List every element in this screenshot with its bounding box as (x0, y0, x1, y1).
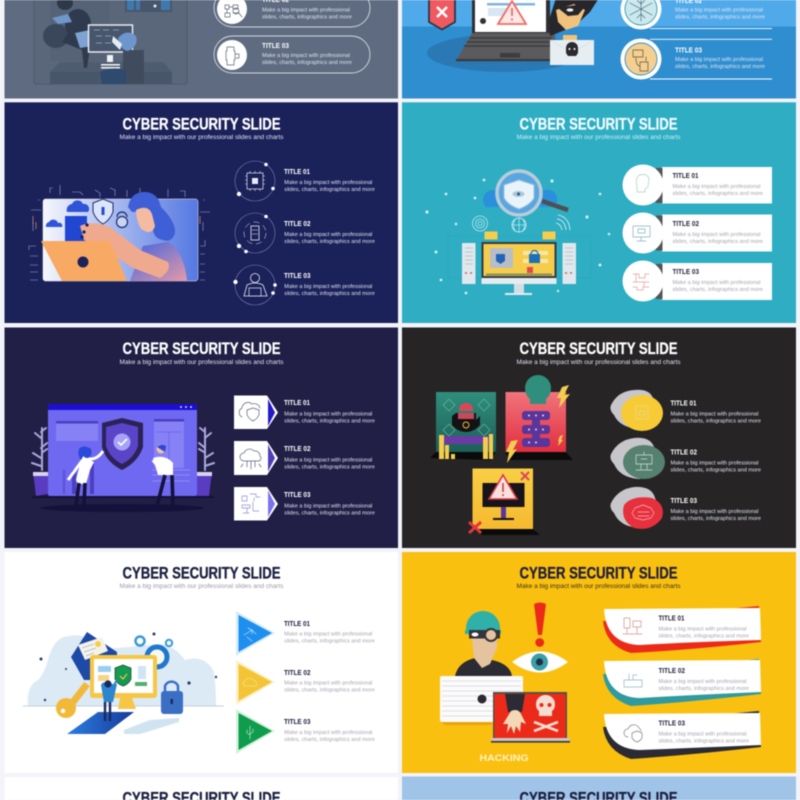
label: hacking: HACKING (480, 753, 528, 763)
subheading: Make a big impact with our professional slides and charts (516, 583, 680, 590)
item: title 01: slides, charts, infographics and more (284, 638, 375, 644)
panel: navy slide with woman at laptop (4, 102, 398, 323)
item: title 01: slides, charts, infographics and more (284, 418, 375, 424)
item: title 01 (610, 390, 761, 431)
illustration: hacker at computer in grey (34, 0, 187, 84)
panel: indigo slide with shield on screen (4, 328, 398, 548)
item: title 03: TITLE 03 (670, 498, 697, 505)
heading: CYBER SECURITY SLIDE (520, 564, 678, 582)
item: title 02: slides, charts, infographics and more (284, 688, 375, 694)
item: title 02: Make a big impact with professional (284, 680, 372, 686)
panel: white slide, bottom left (4, 777, 398, 800)
subheading: Make a big impact with our professional slides and charts (120, 359, 284, 366)
item: title 02 (236, 660, 375, 705)
icon: router (624, 674, 642, 687)
item: title 02 (620, 0, 772, 30)
item: title 02 (214, 0, 370, 27)
item: title 02: slides, charts, infographics and more (672, 239, 763, 245)
item: title 03: slides, charts, infographics and more (284, 510, 375, 516)
item: title 03: Make a big impact with professional (670, 509, 758, 515)
item: title 01: slides, charts, infographics and more (670, 418, 761, 424)
item: title 01 (235, 161, 375, 201)
icon: cloud network arrow box (234, 441, 278, 475)
item: title 03 (603, 711, 761, 759)
subheading: Make a big impact with our professional slides and charts (120, 583, 284, 590)
item: title 03 (610, 487, 761, 529)
item: title 03: slides, charts, infographics and more (670, 516, 761, 522)
item: title 02: slides, charts, infographics and more (658, 686, 749, 692)
heading: CYBER SECURITY SLIDE (520, 115, 678, 133)
item: title 01: Make a big impact with professional (284, 412, 372, 418)
item: title 02 (603, 659, 761, 706)
item: title 01: TITLE 01 (672, 173, 699, 180)
illustration: hacker with hacked laptop (440, 602, 570, 763)
item: title 03: TITLE 03 (284, 492, 311, 499)
icon: connected devices (620, 38, 662, 80)
icon: circuit board arrow box (234, 487, 278, 520)
item: title 03: Make a big impact with professional (284, 504, 372, 510)
item: title 02 (610, 438, 761, 479)
item: title 01: slides, charts, infographics and more (672, 191, 763, 197)
item: title 02: Make a big impact with professional (672, 232, 760, 238)
item: title 02: Make a big impact with professional (262, 8, 350, 14)
item: title 02: Make a big impact with professional (284, 458, 372, 464)
item: title 02: Make a big impact with professional (670, 460, 758, 466)
item: title 01: Make a big impact with professional (284, 632, 372, 638)
icon: circuit lines (622, 260, 664, 302)
heading: CYBER SECURITY SLIDE (122, 115, 281, 133)
item: title 03: slides, charts, infographics and more (658, 738, 749, 744)
panel: blue slide, top right (402, 0, 796, 98)
item: title 02: TITLE 02 (672, 221, 699, 228)
item: title 01: Make a big impact with professional (658, 626, 746, 632)
item: title 01: Make a big impact with professional (670, 412, 758, 418)
item: title 01: slides, charts, infographics and more (658, 634, 749, 640)
item: title 03 (233, 265, 375, 305)
item: title 02 (622, 212, 772, 254)
panel: light blue slide, bottom right (402, 776, 796, 800)
icon: head silhouette (622, 164, 664, 206)
heading: CYBER SECURITY SLIDE (122, 340, 281, 358)
item: title 03: TITLE 03 (284, 719, 311, 726)
item: title 02: TITLE 02 (284, 446, 311, 453)
item: title 02: TITLE 02 (670, 450, 697, 456)
item: title 01 (234, 396, 375, 429)
item: title 02: slides, charts, infographics and more (284, 239, 375, 245)
item: title 03: slides, charts, infographics and more (262, 60, 352, 66)
item: title 01: TITLE 01 (284, 621, 310, 628)
item: title 01 (622, 164, 772, 206)
item: title 03 (236, 709, 375, 754)
icon: support operator at laptop (233, 265, 277, 305)
item: title 01: TITLE 01 (658, 616, 685, 622)
item: title 02: Make a big impact with professional (284, 232, 372, 238)
item: title 03: Make a big impact with professional (284, 284, 372, 290)
heading: CYBER SECURITY SLIDE (520, 340, 678, 358)
item: title 03: TITLE 03 (262, 43, 289, 50)
illustration: two people guarding a shield (32, 404, 214, 512)
item: title 02: TITLE 02 (284, 221, 311, 228)
item: title 03: Make a big impact with professional (675, 57, 763, 63)
item: title 03: TITLE 03 (672, 269, 699, 276)
illustration: hacker and laptop with warning (427, 0, 599, 72)
illustration: computer, key and padlock (23, 632, 224, 734)
item: title 01: slides, charts, infographics and more (284, 187, 375, 193)
panel: yellow slide with hacker (402, 552, 796, 773)
icon: monitor (622, 212, 664, 254)
icon: server with rotating arrows (235, 213, 275, 253)
icon: green triangle with usb (236, 709, 275, 754)
item: title 03: Make a big impact with professional (672, 280, 760, 286)
item: title 02: slides, charts, infographics and more (675, 14, 765, 20)
item: title 02: Make a big impact with professional (675, 8, 763, 14)
icon: red blob with gear ring (610, 487, 663, 529)
icon: processor chip in ring (235, 161, 275, 201)
item: title 01: TITLE 01 (670, 400, 697, 408)
illustration: monitor, servers, shield under magnifier (425, 171, 610, 295)
item: title 03: Make a big impact with professional (284, 730, 372, 736)
icon: shield cloud arrow box (234, 396, 278, 429)
icon: cloud with shield (624, 725, 642, 742)
item: title 03: TITLE 03 (675, 48, 702, 54)
item: title 01: Make a big impact with professional (672, 184, 760, 190)
item: title 03 (234, 487, 375, 520)
item: title 01 (236, 611, 375, 656)
panel: charcoal slide with three cards (402, 328, 796, 548)
item: title 01: TITLE 01 (284, 169, 310, 176)
item: title 03: TITLE 03 (284, 273, 311, 280)
icon: network devices (623, 618, 642, 634)
item: title 02: slides, charts, infographics and more (670, 468, 761, 474)
item: title 03 (214, 36, 370, 73)
icon: snowflake network (620, 0, 662, 30)
illustration: woman using laptop (29, 185, 210, 281)
subheading: Make a big impact with our professional slides and charts (120, 134, 284, 141)
item: title 02: slides, charts, infographics and more (284, 464, 375, 470)
item: title 02: TITLE 02 (658, 668, 685, 675)
item: title 03: slides, charts, infographics and more (284, 737, 375, 743)
subheading: Make a big impact with our professional slides and charts (516, 359, 680, 366)
icon: green blob with robot (610, 438, 665, 479)
illustration: hacker, server and warning cards (430, 375, 573, 535)
panel: grey slide, top left (4, 0, 398, 98)
item: title 02 (235, 213, 375, 253)
item: title 02: TITLE 02 (284, 670, 311, 677)
panel: teal slide with monitor and magnifier (402, 102, 796, 323)
item: title 03 (622, 260, 772, 302)
item: title 02: Make a big impact with professional (658, 679, 746, 685)
item: title 02 (234, 441, 375, 475)
icon: yellow blob with chip (610, 390, 663, 431)
icon: smart watch (217, 40, 247, 70)
heading: CYBER SECURITY SLIDE (122, 564, 281, 582)
item: title 03: TITLE 03 (658, 720, 685, 728)
item: title 03: slides, charts, infographics and more (672, 287, 763, 293)
panel: white slide with key and computer (4, 552, 398, 773)
item: title 02: slides, charts, infographics and more (262, 14, 352, 20)
item: title 01 (603, 606, 761, 653)
item: title 03: Make a big impact with professional (658, 732, 746, 738)
icon: blue triangle with network (236, 611, 275, 656)
item: title 01: Make a big impact with professional (284, 180, 372, 186)
item: title 03 (620, 38, 772, 80)
item: title 01: TITLE 01 (284, 400, 310, 407)
icon: magnifier network (217, 0, 247, 24)
icon: yellow triangle with cloud (236, 660, 275, 705)
subheading: Make a big impact with our professional slides and charts (516, 134, 680, 141)
item: title 03: slides, charts, infographics and more (284, 291, 375, 297)
item: title 03: Make a big impact with professional (262, 53, 350, 59)
item: title 03: slides, charts, infographics and more (675, 64, 765, 70)
